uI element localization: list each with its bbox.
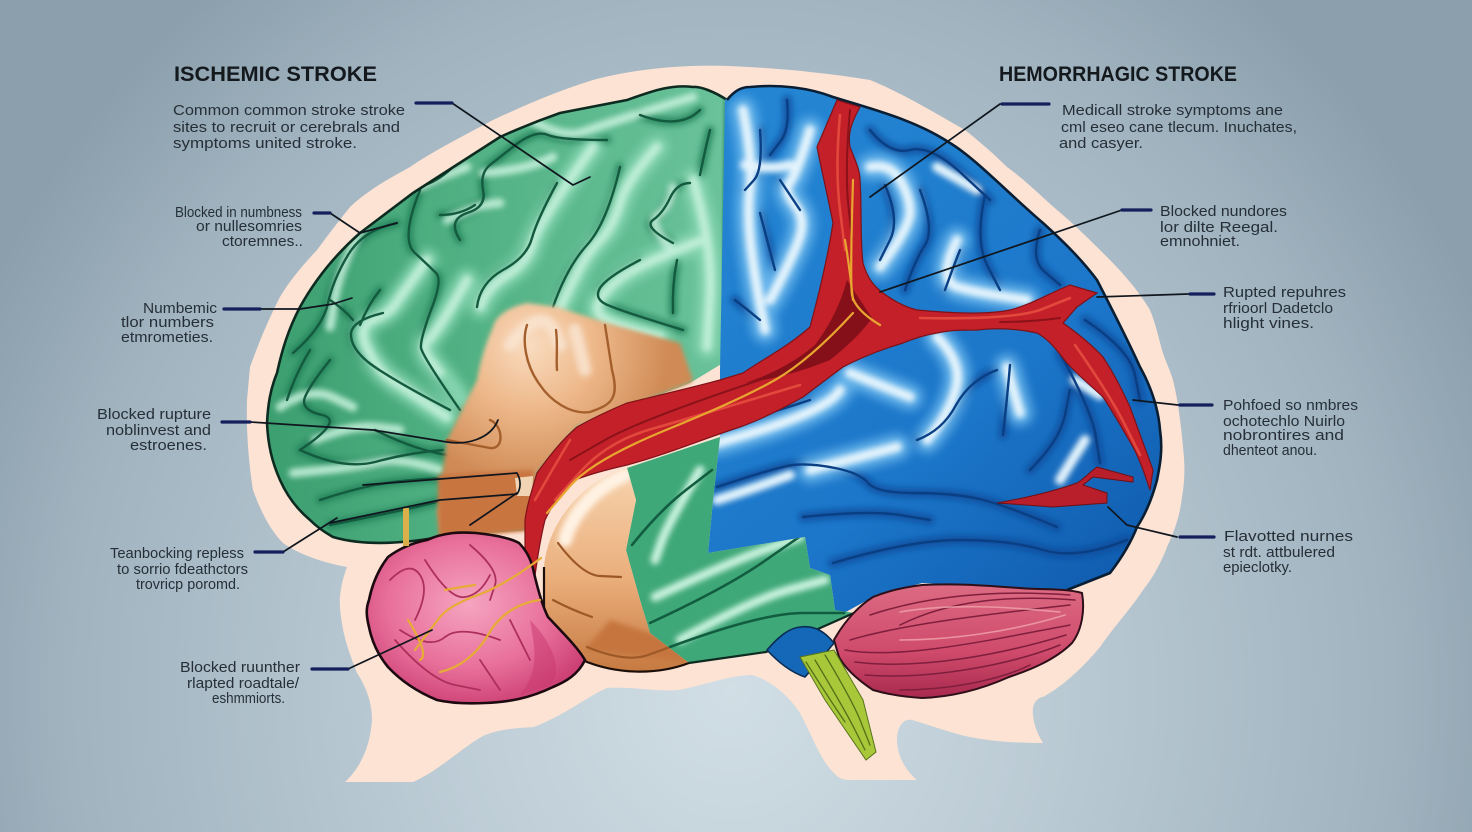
right text block 4 — [1223, 397, 1358, 459]
right text block 4: ochotechlo Nuirlo — [1223, 413, 1345, 430]
right text block 1: Medicall stroke symptoms ane — [1062, 102, 1283, 119]
left text block 2 — [175, 204, 303, 250]
left text block 2: ctoremnes.. — [222, 233, 303, 250]
right text block 1 — [1059, 102, 1297, 152]
left text block 5: to sorrio fdeathctors — [117, 561, 248, 578]
left text block 6: rlapted roadtale/ — [187, 675, 300, 692]
left text block 4: Blocked rupture — [97, 406, 211, 423]
left text block 4: noblinvest and — [106, 422, 211, 439]
right text block 4: Pohfoed so nmbres — [1223, 397, 1358, 414]
yellow stem connector — [403, 508, 409, 546]
right text block 3 — [1223, 284, 1346, 332]
left text block 4: estroenes. — [130, 437, 207, 454]
vessel highlights — [535, 115, 1140, 500]
right text block 5: st rdt. attbulered — [1223, 544, 1335, 561]
right text block 3: hlight vines. — [1223, 315, 1314, 332]
right text block 1: and casyer. — [1059, 135, 1143, 152]
red middle cerebral artery — [525, 100, 1153, 583]
left text block 1: Common common stroke stroke — [173, 102, 405, 119]
left text block 3: Numbemic — [143, 300, 218, 317]
right text block 2: lor dilte Reegal. — [1160, 219, 1278, 236]
left text block 6: Blocked ruunther — [180, 659, 300, 676]
green lower temporal lobe — [626, 437, 854, 663]
right text block 4: nobrontires and — [1223, 427, 1344, 444]
left text block 1: sites to recruit or cerebrals and — [173, 119, 400, 136]
left text block 3 — [121, 300, 218, 346]
dark inner vessel — [745, 280, 872, 383]
right text block 5 — [1223, 528, 1353, 576]
left text block 4 — [97, 406, 211, 454]
left heading: ISCHEMIC STROKE — [174, 63, 377, 86]
blue hemisphere — [708, 86, 1161, 613]
lower right bleed — [997, 467, 1133, 507]
right text block 1: cml eseo cane tlecum. Inuchates, — [1061, 119, 1297, 136]
left text block 3: tlor numbers — [121, 314, 214, 331]
left text block 5: trovricp poromd. — [136, 576, 240, 593]
callout leader lines — [250, 103, 1188, 669]
right text block 2: Blocked nundores — [1160, 203, 1287, 220]
right text block 5: Flavotted nurnes — [1224, 528, 1353, 545]
left text block 2: Blocked in numbness — [175, 204, 302, 221]
right text block 5: epieclotky. — [1223, 559, 1292, 576]
left text block 6: eshmmiorts. — [212, 690, 285, 707]
right text block 3: Rupted repuhres — [1223, 284, 1346, 301]
orange central region — [437, 303, 693, 538]
right text block 3: rfrioorl Dadetclo — [1223, 300, 1333, 317]
orange temporal pole — [544, 468, 690, 672]
left text block 3: etmrometies. — [121, 329, 213, 346]
callout navy ticks — [222, 103, 1214, 669]
left text block 5 — [110, 545, 248, 593]
right text block 2 — [1160, 203, 1287, 250]
left text block 6 — [180, 659, 300, 707]
brain halo outline — [247, 66, 1184, 782]
right heading: HEMORRHAGIC STROKE — [999, 63, 1237, 86]
left text block 5: Teanbocking repless — [110, 545, 244, 562]
brain illustration — [267, 86, 1161, 760]
left text block 1: symptoms united stroke. — [173, 135, 357, 152]
left text block 1 — [173, 102, 405, 152]
green left hemisphere — [267, 86, 727, 543]
pink frontal bulb — [367, 533, 585, 703]
brain stem — [767, 627, 876, 760]
left text block 2: or nullesomries — [196, 218, 302, 235]
right text block 4: dhenteot anou. — [1223, 442, 1317, 459]
right text block 2: emnohniet. — [1160, 233, 1240, 250]
cerebellum — [834, 584, 1083, 698]
